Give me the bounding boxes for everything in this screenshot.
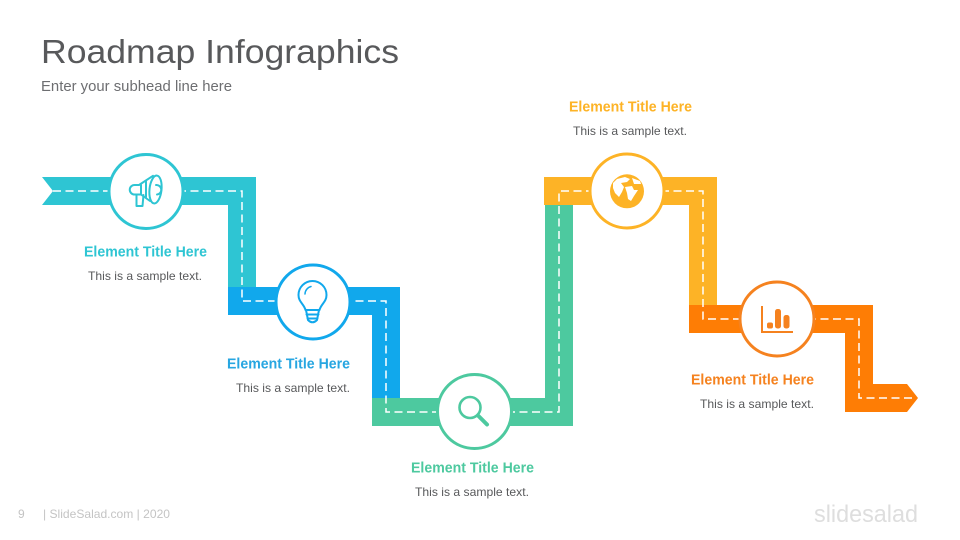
dashed route line xyxy=(53,191,914,412)
step 3 text: This is a sample text. xyxy=(415,485,529,499)
step 2: light bulb node xyxy=(276,265,350,339)
title: Roadmap Infographics xyxy=(41,34,399,71)
step 1 title: Element Title Here xyxy=(84,244,207,260)
icon: bar chart xyxy=(761,306,793,333)
roadmap path: blue segment xyxy=(228,287,400,398)
step 5 text: This is a sample text. xyxy=(700,397,814,411)
roadmap path: teal segment xyxy=(42,177,256,287)
step 2 text: This is a sample text. xyxy=(236,381,350,395)
icon: magnifier xyxy=(460,397,487,424)
step 3: magnifier node xyxy=(438,374,512,448)
step 2 title: Element Title Here xyxy=(227,356,350,372)
roadmap path: yellow segment xyxy=(544,177,717,305)
step 3 title: Element Title Here xyxy=(411,460,534,476)
step 4: globe node xyxy=(590,154,664,228)
step 5 title: Element Title Here xyxy=(691,372,814,388)
roadmap path: orange segment xyxy=(689,305,918,412)
subtitle: Enter your subhead line here xyxy=(41,79,232,95)
step 4 title: Element Title Here xyxy=(569,98,692,116)
page number: 9 xyxy=(18,507,25,521)
step 1 text: This is a sample text. xyxy=(88,269,202,283)
icon: megaphone xyxy=(130,175,163,206)
icon: globe xyxy=(610,174,644,208)
icon: light bulb xyxy=(298,281,326,322)
roadmap path: green segment xyxy=(372,205,573,426)
step 1: megaphone node xyxy=(106,152,186,232)
logo wordmark: slidesalad xyxy=(814,501,918,528)
footer text: | SlideSalad.com | 2020 xyxy=(43,507,170,521)
step 4 text: This is a sample text. xyxy=(573,124,687,138)
step 5: bar chart node xyxy=(740,282,814,356)
